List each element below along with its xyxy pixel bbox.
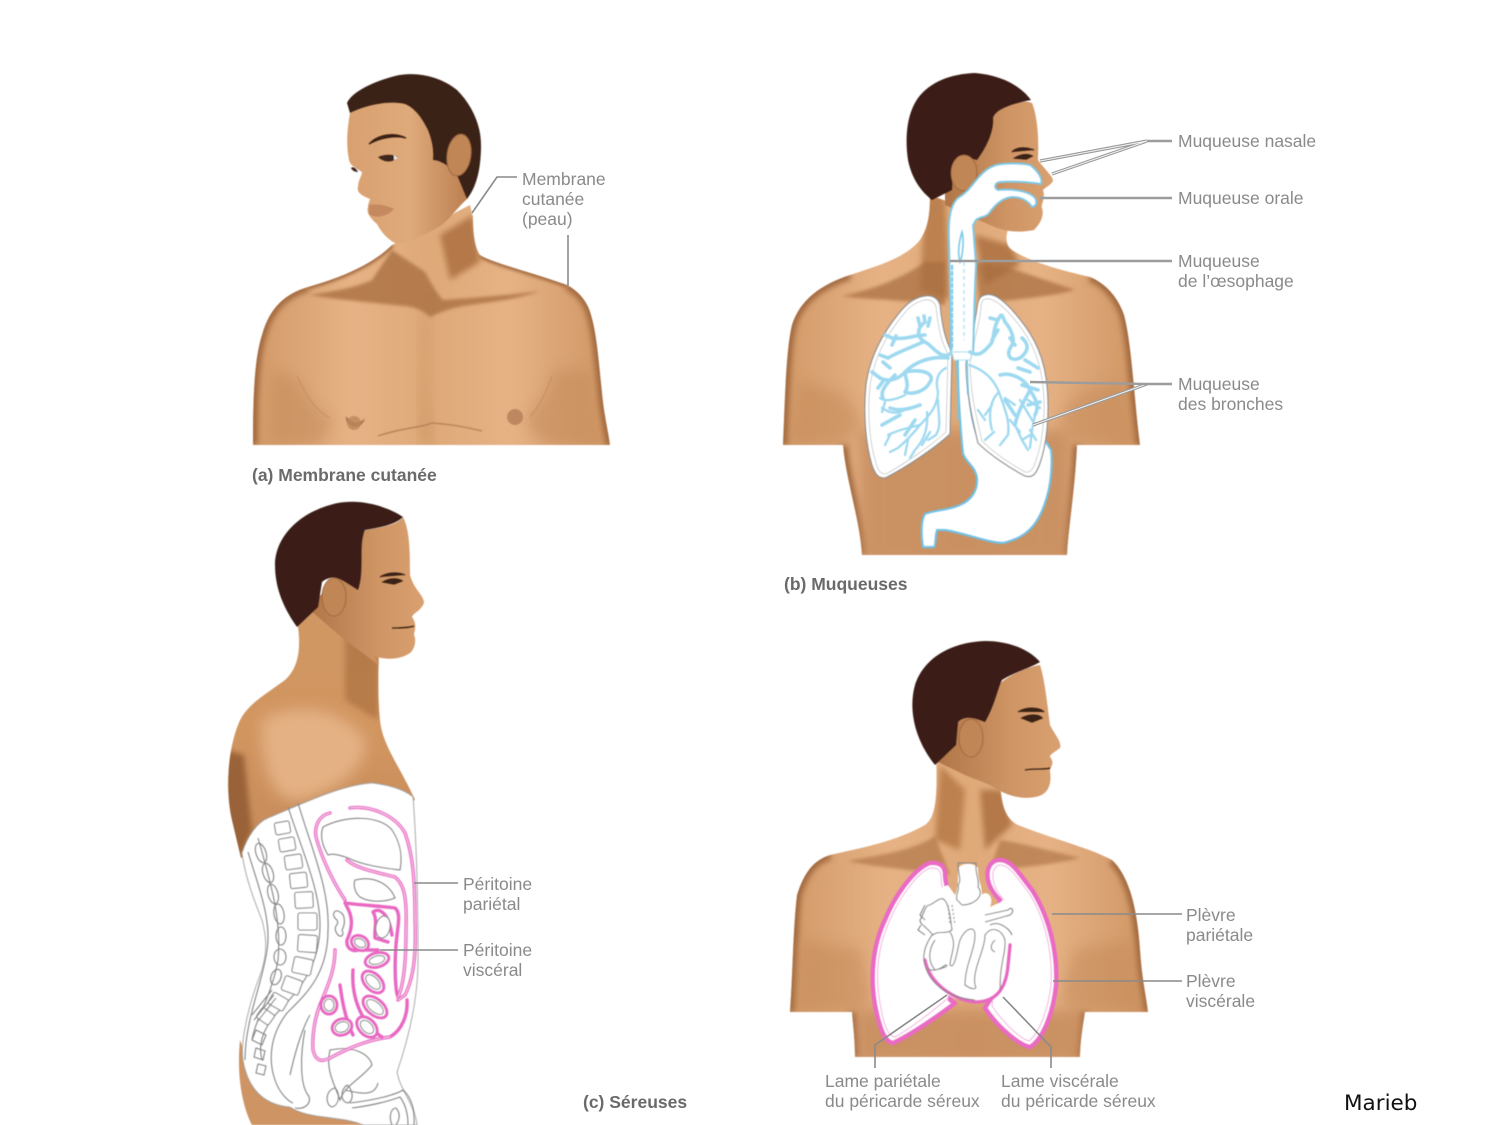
label: membrane cutanée: cutanée — [522, 189, 584, 209]
lower skin — [239, 1040, 365, 1125]
clavicle shadows — [842, 262, 945, 305]
labels: mucous membranes: Muqueuse nasale — [1178, 131, 1316, 151]
leader lines — [472, 177, 568, 286]
leader lines — [950, 141, 1172, 425]
hair — [347, 74, 481, 199]
figure (c): peritoneum profile — [222, 502, 532, 1125]
labels: peritoneum: pariétal — [463, 894, 520, 914]
hair — [912, 641, 1040, 765]
eye — [1012, 148, 1034, 159]
hair — [275, 502, 403, 627]
pleural lungs — [873, 860, 1056, 1047]
labels: peritoneum: Péritoine — [463, 874, 532, 894]
chest details — [297, 376, 552, 436]
labels: mucous membranes: de l’œsophage — [1178, 271, 1294, 291]
ear — [951, 155, 977, 191]
face — [938, 665, 1060, 798]
face — [945, 101, 1053, 232]
left bronchial tree — [872, 316, 950, 458]
labels: pleura and pericardium: viscérale — [1186, 991, 1255, 1011]
hair — [907, 73, 1031, 200]
ear — [959, 719, 983, 757]
face — [347, 98, 472, 244]
torso — [790, 755, 1148, 1065]
upper torso and neck — [222, 595, 415, 860]
head — [310, 517, 424, 665]
labels: mucous membranes: Muqueuse — [1178, 374, 1260, 394]
labels: pleura and pericardium: pariétale — [1186, 925, 1253, 945]
mouth — [369, 204, 394, 217]
source credit: Marieb — [1344, 1091, 1417, 1116]
pericardium and heart — [918, 863, 1013, 1002]
eyes and brows — [351, 135, 406, 172]
figure (a): skin membrane bust — [253, 74, 610, 445]
label: membrane cutanée: (peau) — [522, 209, 573, 229]
labels: pleura and pericardium: Plèvre — [1186, 971, 1236, 991]
clavicle shadow — [310, 250, 540, 317]
labels: mucous membranes: des bronches — [1178, 394, 1283, 414]
eye and mouth — [380, 573, 414, 628]
labels: pleura and pericardium: du péricarde séreux — [825, 1091, 980, 1111]
labels: mucous membranes: Muqueuse — [1178, 251, 1260, 271]
parietal and visceral peritoneum — [313, 807, 415, 1060]
ear — [322, 578, 346, 616]
labels: pleura and pericardium: du péricarde séreux — [1001, 1091, 1156, 1111]
eye and mouth — [1018, 708, 1050, 770]
labels: peritoneum: viscéral — [463, 960, 522, 980]
ear — [444, 133, 474, 177]
figure (d): pleura and pericardium bust — [790, 641, 1255, 1111]
airway: nasal, oral, pharynx, trachea — [949, 164, 1041, 353]
white section of abdomen — [242, 783, 418, 1125]
figure (b): mucous membranes bust — [783, 73, 1316, 565]
caption (a): (a) Membrane cutanée — [252, 465, 437, 485]
torso — [783, 195, 1140, 565]
label: membrane cutanée: Membrane — [522, 169, 606, 189]
caption (c): (c) Séreuses — [583, 1092, 687, 1112]
right lung — [966, 295, 1048, 477]
trachea detail — [952, 232, 972, 420]
labels: pleura and pericardium: Lame pariétale — [825, 1071, 941, 1091]
torso and neck — [253, 205, 610, 445]
spine and vertebrae — [245, 803, 414, 1125]
caption (b): (b) Muqueuses — [784, 574, 908, 594]
labels: peritoneum: Péritoine — [463, 940, 532, 960]
right bronchial tree — [969, 315, 1040, 450]
clavicle shadows — [848, 836, 950, 875]
labels: mucous membranes: Muqueuse orale — [1178, 188, 1304, 208]
left lung — [865, 296, 952, 478]
leader lines — [875, 914, 1182, 1068]
leader lines — [380, 883, 458, 950]
labels: pleura and pericardium: Plèvre — [1186, 905, 1236, 925]
stomach and oesophagus mucosa — [922, 353, 1052, 547]
labels: pleura and pericardium: Lame viscérale — [1001, 1071, 1119, 1091]
